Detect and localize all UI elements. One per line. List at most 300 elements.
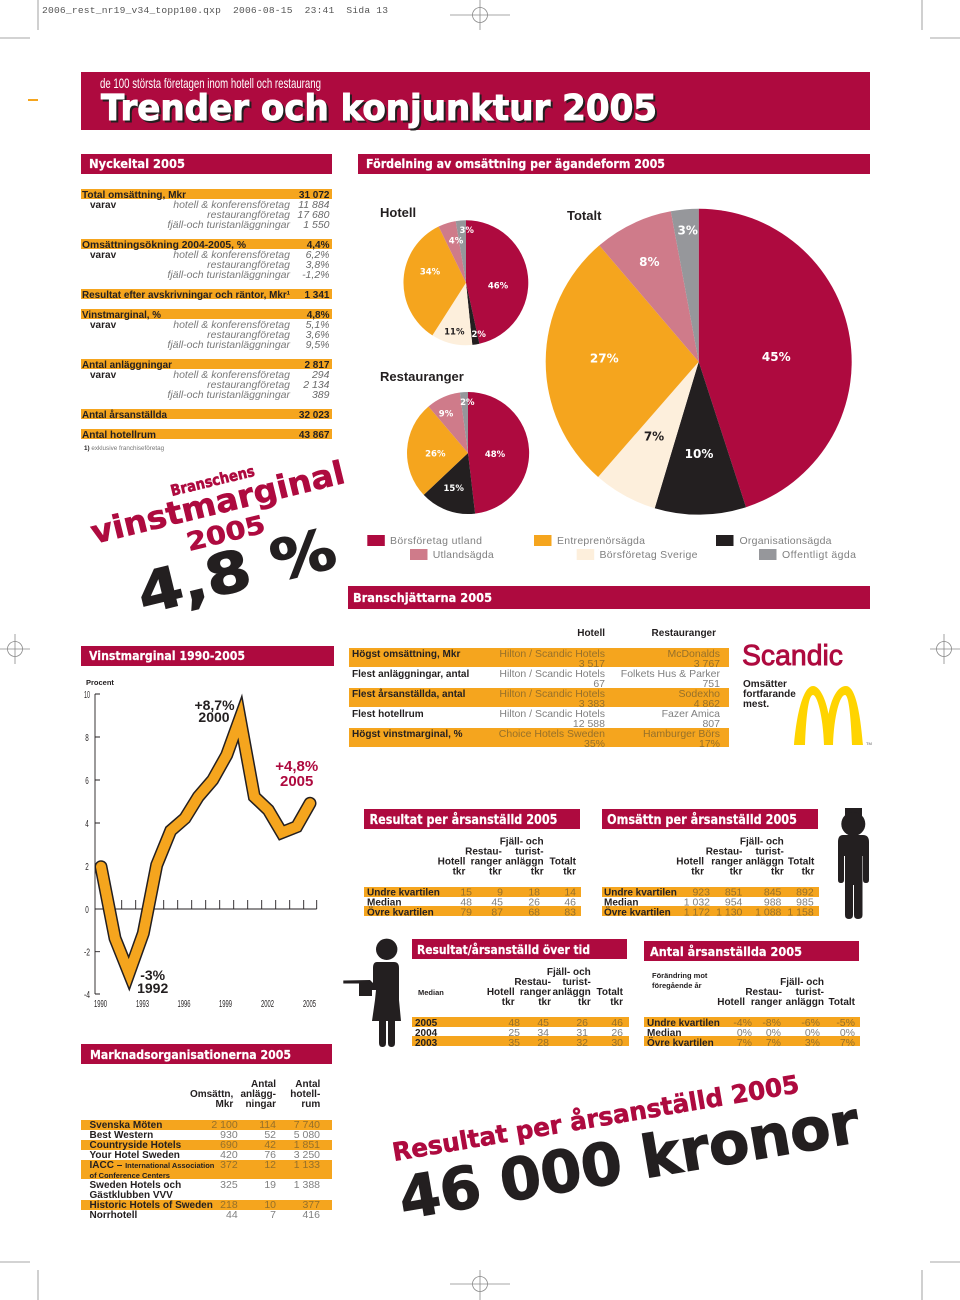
panel: Nyckeltal 2005: hotell & konferensföretag (173, 369, 290, 381)
pie chart: Restauranger: 2% (460, 398, 475, 408)
line chart: 1993 (136, 999, 149, 1010)
panel: Omsättn per årsanställd 2005: 923 (692, 886, 710, 898)
panel: Resultat/årsanställd över tid: 31 (576, 1027, 588, 1039)
line chart: 4 (85, 819, 89, 830)
panel: Nyckeltal 2005: Nyckeltal 2005 (89, 156, 185, 171)
panel: Nyckeltal 2005: restaurangföretag (207, 329, 290, 341)
icon: male waiter (838, 808, 869, 919)
panel: Branschjättarna 2005: Hilton / Scandic Hotels (499, 668, 605, 680)
panel: Branschjättarna 2005: Hilton / Scandic Hotels (499, 708, 605, 720)
panel: Resultat/årsanställd över tid: 2003 (415, 1038, 438, 1049)
callout: Branschens vinstmarginal 4,8 %: 4,8 % (131, 517, 343, 628)
panel: Resultat/årsanställd över tid: 2005 (415, 1018, 438, 1029)
panel: Nyckeltal 2005: 32 023 (299, 410, 330, 421)
panel: Resultat/årsanställd över tid: tkr (502, 997, 515, 1008)
panel: Omsättn per årsanställd 2005: tkr (802, 866, 814, 878)
panel: Marknadsorganisationerna 2005: 420 (220, 1149, 238, 1161)
panel: Omsättn per årsanställd 2005 (602, 809, 819, 918)
pie chart: Hotell: 34% (420, 268, 441, 278)
panel: Branschjättarna 2005: Flest hotellrum (352, 709, 424, 720)
panel: Marknadsorganisationerna 2005: 42 (264, 1139, 276, 1151)
pie chart: Restauranger: 15% (444, 484, 464, 494)
annotation: 2000 peak: +8,7% (194, 697, 235, 713)
panel: Marknadsorganisationerna 2005: 218 (220, 1199, 238, 1211)
pie chart: Hotell (380, 205, 528, 345)
panel: Nyckeltal 2005: 3,6% (306, 329, 330, 341)
callout: Branschens vinstmarginal 4,8 %: Branschens (169, 462, 257, 500)
panel: Resultat/årsanställd över tid: anläggn (552, 987, 591, 998)
panel: Marknadsorganisationerna 2005: 416 (302, 1209, 320, 1221)
panel: Marknadsorganisationerna 2005: 7 (270, 1209, 276, 1221)
line chart: 1990 (94, 999, 107, 1010)
panel: Omsättn per årsanställd 2005: 1 032 (684, 896, 710, 908)
panel: Nyckeltal 2005: varav (90, 370, 117, 381)
callout: Branschens vinstmarginal 4,8 %: 2005 (184, 510, 268, 557)
panel: Marknadsorganisationerna 2005: Countryside Hotels (90, 1140, 182, 1151)
panel: Marknadsorganisationerna 2005: Antal (295, 1079, 321, 1090)
panel: Branschjättarna 2005: Choice Hotels Sweden (499, 728, 605, 740)
panel: Marknadsorganisationerna 2005: Historic Hotels of Sweden (90, 1200, 213, 1211)
panel: Antal årsanställda 2005: Totalt (829, 997, 856, 1008)
note: Omsätter fortfarande mest: fortfarande (743, 689, 796, 700)
panel: Nyckeltal 2005: 4,4% (307, 240, 330, 251)
panel: Resultat per årsanställd 2005: 68 (528, 906, 540, 918)
pie chart: Totalt: 10% (685, 447, 713, 461)
panel: Marknadsorganisationerna 2005: Best Western (90, 1130, 153, 1141)
line chart: 2002 (261, 999, 274, 1010)
panel: Marknadsorganisationerna 2005: 52 (264, 1129, 276, 1141)
annotation: 1992 low: -3% (140, 967, 166, 983)
panel: Omsättn per årsanställd 2005: Restau- (706, 846, 742, 858)
panel: Marknadsorganisationerna 2005: Gästklubben VVV (90, 1190, 173, 1201)
panel: Resultat per årsanställd 2005: anläggn (505, 856, 544, 868)
annotation: 2000 peak: 2000 (198, 709, 230, 725)
title banner: Trender och konjunktur 2005 (101, 88, 657, 129)
panel: Marknadsorganisationerna 2005: 325 (220, 1179, 238, 1191)
panel: Fördelning av omsättning per ägandeform 2005 (358, 154, 870, 174)
pie chart: Restauranger: 9% (439, 410, 454, 420)
panel: Resultat per årsanställd 2005: Resultat per årsanställd 2005 (370, 813, 558, 828)
panel: Marknadsorganisationerna 2005: 3 250 (294, 1149, 320, 1161)
panel: Omsättn per årsanställd 2005: Omsättn per årsanställd 2005 (607, 813, 797, 828)
panel: Nyckeltal 2005: hotell & konferensföretag (173, 249, 290, 261)
annotation: 2000 peak (194, 697, 235, 725)
pie chart: Totalt: 45% (762, 350, 791, 364)
panel: Nyckeltal 2005: fjäll-och turistanläggningar (167, 219, 290, 231)
panel: Branschjättarna 2005: Restauranger (652, 628, 716, 639)
legend: Offentligt ägda (782, 549, 856, 561)
panel: Marknadsorganisationerna 2005: 690 (220, 1139, 238, 1151)
panel: Resultat/årsanställd över tid: Resultat/årsanställd över tid (417, 942, 590, 957)
panel: Antal årsanställda 2005: 0% (766, 1027, 781, 1039)
panel: Resultat per årsanställd 2005: 83 (564, 906, 576, 918)
panel: Omsättn per årsanställd 2005: Övre kvartilen (604, 906, 671, 918)
panel: Branschjättarna 2005: Hotell (577, 628, 605, 639)
panel: Antal årsanställda 2005: 3% (805, 1037, 820, 1049)
panel: Marknadsorganisationerna 2005: Antal (251, 1079, 276, 1090)
panel: Resultat/årsanställd över tid: 25 (508, 1027, 520, 1039)
panel: Marknadsorganisationerna 2005: IACC – International Association (90, 1160, 215, 1171)
panel: Resultat/årsanställd över tid: 35 (508, 1037, 520, 1049)
panel: Nyckeltal 2005 (81, 154, 332, 452)
panel: Nyckeltal 2005: Resultat efter avskrivningar och räntor, Mkr¹ (82, 290, 291, 301)
panel: Nyckeltal 2005: hotell & konferensföretag (173, 319, 290, 331)
panel: Omsättn per årsanställd 2005: Fjäll- och (740, 836, 784, 848)
legend: Entreprenörsägda (557, 535, 645, 547)
panel: Omsättn per årsanställd 2005: 1 172 (684, 906, 710, 918)
panel: Nyckeltal 2005: Antal anläggningar (82, 360, 172, 371)
panel: Resultat/årsanställd över tid: 34 (537, 1027, 549, 1039)
panel: Antal årsanställda 2005: 0% (805, 1027, 820, 1039)
panel: Branschjättarna 2005: 807 (702, 718, 720, 730)
panel: Marknadsorganisationerna 2005: 377 (302, 1199, 320, 1211)
panel: Marknadsorganisationerna 2005: Norrhotell (90, 1210, 138, 1221)
panel: Branschjättarna 2005: 67 (593, 678, 605, 690)
panel: Omsättn per årsanställd 2005: tkr (691, 866, 704, 878)
panel: Nyckeltal 2005: varav (90, 200, 117, 211)
pie chart: Hotell: 4% (449, 236, 464, 246)
panel: Omsättn per årsanställd 2005: 845 (764, 886, 782, 898)
legend: Utlandsägda (433, 549, 494, 561)
panel: Resultat/årsanställd över tid: 48 (508, 1017, 520, 1029)
panel: Resultat per årsanställd 2005: tkr (531, 866, 544, 878)
panel: Nyckeltal 2005: 4,8% (307, 310, 330, 321)
pie chart: Totalt: 27% (590, 352, 619, 366)
panel: Nyckeltal 2005: 11 884 (298, 199, 330, 211)
panel: Omsättn per årsanställd 2005: ranger (711, 856, 743, 868)
panel: Marknadsorganisationerna 2005: of Conference Centers (90, 1171, 170, 1180)
panel: Branschjättarna 2005 (348, 586, 870, 750)
legend: Börsföretag Sverige (600, 549, 698, 561)
panel: Marknadsorganisationerna 2005: rum (301, 1099, 320, 1110)
panel: Marknadsorganisationerna 2005: Marknadsorganisationerna 2005 (90, 1047, 291, 1062)
panel: Omsättn per årsanställd 2005: 892 (796, 886, 814, 898)
panel: Antal årsanställda 2005: 7% (840, 1037, 855, 1049)
panel: Nyckeltal 2005: -1,2% (302, 269, 330, 281)
panel: Branschjättarna 2005: Fazer Amica (662, 708, 720, 720)
panel: Resultat per årsanställd 2005: 46 (564, 896, 576, 908)
pie chart: Hotell: 46% (488, 282, 509, 292)
annotation: 2005 (275, 758, 318, 790)
panel: Resultat/årsanställd över tid: 45 (537, 1017, 549, 1029)
annotation: 1992 low (137, 967, 168, 996)
panel: Branschjättarna 2005: Flest anläggningar, antal (352, 669, 469, 680)
line chart: 2005 (303, 999, 316, 1010)
panel: Antal årsanställda 2005: Restau- (745, 987, 782, 998)
panel: Antal årsanställda 2005: Övre kvartilen (647, 1036, 714, 1049)
panel: Marknadsorganisationerna 2005: Omsättn, (190, 1089, 234, 1100)
panel: Resultat per årsanställd 2005: Totalt (550, 856, 577, 868)
panel: Omsättn per årsanställd 2005: 1 088 (755, 906, 782, 918)
line chart: 1999 (219, 999, 232, 1010)
line chart: -2 (84, 948, 90, 958)
title banner: de 100 största företagen inom hotell och restaurang (100, 75, 321, 91)
panel: Nyckeltal 2005: Antal hotellrum (82, 430, 156, 441)
title banner (81, 72, 870, 131)
panel: Resultat/årsanställd över tid: 28 (537, 1037, 549, 1049)
panel: Nyckeltal 2005: varav (90, 250, 117, 261)
panel: Resultat per årsanställd 2005: Övre kvartilen (367, 906, 434, 918)
panel: Resultat/årsanställd över tid: Hotell (487, 987, 515, 998)
panel: Branschjättarna 2005: 3 517 (579, 658, 605, 670)
panel: Resultat/årsanställd över tid: 30 (611, 1037, 623, 1049)
note: Omsätter fortfarande mest (743, 679, 796, 710)
panel: Nyckeltal 2005: Antal årsanställda (82, 409, 167, 421)
panel: Resultat per årsanställd 2005: 18 (528, 886, 540, 898)
panel: Omsättn per årsanställd 2005: 954 (725, 896, 743, 908)
pie chart: Hotell: 3% (459, 226, 474, 236)
panel: Resultat per årsanställd 2005: tkr (489, 866, 502, 878)
panel: Marknadsorganisationerna 2005: Sweden Hotels och (90, 1180, 181, 1191)
panel: Omsättn per årsanställd 2005: turist- (755, 846, 784, 858)
line chart: -4 (84, 990, 90, 1001)
panel: Resultat per årsanställd 2005: ranger (471, 856, 502, 868)
panel: Marknadsorganisationerna 2005: 372 (220, 1159, 238, 1171)
pie chart: Totalt (546, 208, 852, 515)
pie chart: Restauranger: 26% (425, 450, 446, 460)
panel: Branschjättarna 2005: Sodexho (679, 688, 720, 700)
line chart: 6 (85, 776, 89, 787)
panel: Nyckeltal 2005: 43 867 (299, 430, 330, 441)
panel: Nyckeltal 2005: 6,2% (306, 249, 330, 261)
panel: Marknadsorganisationerna 2005: hotell- (290, 1089, 320, 1100)
panel: Resultat/årsanställd över tid: 2004 (415, 1028, 438, 1039)
panel: Antal årsanställda 2005: Antal årsanställda 2005 (650, 944, 802, 959)
callout: Branschens vinstmarginal 4,8 % (87, 453, 348, 628)
panel: Vinstmarginal 1990-2005 (81, 646, 334, 1010)
panel: Marknadsorganisationerna 2005: anlägg- (240, 1089, 276, 1100)
panel: Nyckeltal 2005: 9,5% (306, 339, 330, 351)
panel: Marknadsorganisationerna 2005: ningar (245, 1099, 276, 1110)
panel: Nyckeltal 2005: 1 550 (303, 219, 330, 231)
panel: Nyckeltal 2005: Total omsättning, Mkr (82, 190, 186, 201)
line chart: 0 (85, 905, 89, 916)
panel: Branschjättarna 2005: Hilton / Scandic Hotels (499, 648, 605, 660)
panel: Marknadsorganisationerna 2005: 10 (264, 1199, 276, 1211)
panel: Marknadsorganisationerna 2005: Your Hotel Sweden (90, 1150, 180, 1161)
panel: Marknadsorganisationerna 2005: Svenska Möten (90, 1120, 162, 1131)
panel: Marknadsorganisationerna 2005: 1 851 (294, 1139, 320, 1151)
panel: Nyckeltal 2005: 17 680 (297, 209, 330, 221)
panel: Branschjättarna 2005: Högst omsättning, Mkr (352, 649, 460, 660)
legend: Börsföretag utland (390, 535, 482, 547)
panel: Nyckeltal 2005: fjäll-och turistanläggningar (167, 339, 290, 351)
pie chart: Hotell: Hotell (380, 205, 416, 220)
pie chart: Totalt: Totalt (567, 208, 602, 223)
panel: Resultat/årsanställd över tid: Fjäll- och (547, 967, 591, 978)
panel: Marknadsorganisationerna 2005: 7 740 (294, 1119, 320, 1131)
panel: Resultat/årsanställd över tid: tkr (578, 997, 591, 1008)
panel: Antal årsanställda 2005: Median (647, 1028, 681, 1039)
legend (367, 535, 856, 561)
panel: Resultat per årsanställd 2005: 15 (460, 886, 472, 898)
pie chart: Hotell: 11% (444, 328, 465, 338)
file slug: 2006_rest_nr19_v34_topp100.qxp 2006-08-15 23:41 Sida 13 (42, 5, 388, 16)
panel: Antal årsanställda 2005: 7% (766, 1037, 781, 1049)
pie chart: Restauranger (380, 369, 529, 514)
panel: Nyckeltal 2005: 1 341 (304, 290, 330, 301)
panel: Nyckeltal 2005: Omsättningsökning 2004-2005, % (82, 240, 246, 251)
panel: Marknadsorganisationerna 2005: 930 (220, 1129, 238, 1141)
panel: Nyckeltal 2005: Vinstmarginal, % (82, 310, 161, 321)
panel: Branschjättarna 2005: Högst vinstmarginal, % (352, 729, 463, 740)
line chart (84, 690, 317, 1010)
annotation: 1992 low: 1992 (137, 980, 168, 996)
legend: Organisationsägda (740, 535, 832, 547)
panel: Marknadsorganisationerna 2005: 5 080 (294, 1129, 320, 1141)
panel: Antal årsanställda 2005: föregående år (652, 981, 702, 990)
callout: Resultat per årsanställd 46 000 kronor: Resultat per årsanställd 2005 (390, 1070, 801, 1167)
panel: Omsättn per årsanställd 2005: 985 (796, 896, 814, 908)
panel: Resultat/årsanställd över tid: Totalt (597, 987, 624, 998)
panel: Omsättn per årsanställd 2005: 988 (764, 896, 782, 908)
panel: Branschjättarna 2005: Flest årsanställda, antal (352, 688, 466, 700)
panel: Marknadsorganisationerna 2005: 1 388 (294, 1179, 320, 1191)
panel: Resultat/årsanställd över tid: 26 (576, 1017, 588, 1029)
panel: Resultat per årsanställd 2005: 48 (460, 896, 472, 908)
panel: Resultat per årsanställd 2005: Fjäll- och (500, 836, 544, 848)
panel: Branschjättarna 2005: 3 767 (694, 658, 720, 670)
logo: Scandic: Scandic (742, 640, 843, 672)
logo: McDonald's arches (794, 686, 872, 746)
panel: Nyckeltal 2005: 31 072 (299, 190, 330, 201)
panel: Nyckeltal 2005: hotell & konferensföretag (173, 199, 290, 211)
callout: Resultat per årsanställd 46 000 kronor: 46 000 kronor (394, 1088, 864, 1233)
panel: Branschjättarna 2005: 35% (584, 738, 605, 750)
panel: Fördelning av omsättning per ägandeform 2005: Fördelning av omsättning per ägandeform 2005 (366, 156, 665, 171)
panel: Resultat/årsanställd över tid (412, 939, 629, 1049)
panel: Resultat per årsanställd 2005: tkr (563, 866, 576, 878)
panel: Branschjättarna 2005: 751 (702, 678, 720, 690)
annotation: 2005: +4,8% (275, 758, 318, 775)
panel: Antal årsanställda 2005: Hotell (717, 997, 745, 1008)
line chart: 2 (85, 862, 89, 873)
panel: Omsättn per årsanställd 2005: 1 130 (716, 906, 743, 918)
title banner: Trender och konjunktur 2005 (103, 90, 659, 131)
panel: Resultat/årsanställd över tid: 46 (611, 1017, 623, 1029)
panel: Antal årsanställda 2005: -4% (733, 1017, 752, 1029)
panel: Marknadsorganisationerna 2005: 1 133 (294, 1159, 320, 1171)
panel: Branschjättarna 2005: Branschjättarna 2005 (353, 590, 492, 605)
panel: Resultat/årsanställd över tid: tkr (610, 997, 623, 1008)
panel: Omsättn per årsanställd 2005: Hotell (676, 856, 704, 868)
panel: Nyckeltal 2005: 5,1% (306, 319, 330, 331)
panel: Branschjättarna 2005: McDonalds (667, 648, 720, 660)
panel: Resultat per årsanställd 2005: tkr (453, 866, 465, 878)
panel: Resultat/årsanställd över tid: 32 (576, 1037, 588, 1049)
panel: Antal årsanställda 2005: turist- (796, 987, 824, 998)
panel: Resultat/årsanställd över tid: Median (418, 988, 444, 997)
orange margin dash (28, 99, 38, 101)
panel: Resultat per årsanställd 2005: turist- (515, 846, 544, 858)
note: Omsätter fortfarande mest: mest. (743, 699, 769, 710)
panel: Antal årsanställda 2005: 7% (737, 1037, 752, 1049)
line chart: 10 (84, 690, 90, 701)
panel: Nyckeltal 2005: restaurangföretag (207, 209, 290, 221)
pie chart: Totalt: 3% (678, 224, 698, 238)
panel: Marknadsorganisationerna 2005: Mkr (216, 1099, 233, 1110)
panel: Resultat per årsanställd 2005: Undre kvartilen (367, 888, 440, 898)
note: Omsätter fortfarande mest: Omsätter (743, 679, 787, 690)
panel: Antal årsanställda 2005: 0% (840, 1027, 855, 1039)
panel: Resultat/årsanställd över tid: tkr (538, 997, 551, 1008)
panel: Marknadsorganisationerna 2005: 19 (264, 1179, 276, 1191)
panel: Nyckeltal 2005: 1) exklusive franchiseföretag (84, 445, 165, 452)
pie chart: Restauranger: 48% (485, 450, 506, 460)
panel: Antal årsanställda 2005: Undre kvartilen (647, 1018, 720, 1029)
panel: Antal årsanställda 2005: Fjäll- och (780, 977, 824, 988)
panel: Nyckeltal 2005: 294 (311, 369, 330, 381)
panel: Resultat/årsanställd över tid: ranger (520, 987, 551, 998)
panel: Branschjättarna 2005: 4 862 (694, 698, 720, 710)
panel: Resultat per årsanställd 2005 (364, 809, 581, 918)
pie chart: Hotell: 2% (471, 330, 486, 340)
panel: Antal årsanställda 2005: ranger (751, 997, 782, 1008)
panel: Nyckeltal 2005: fjäll-och turistanläggningar (167, 269, 290, 281)
panel: Nyckeltal 2005: varav (90, 320, 117, 331)
panel: Antal årsanställda 2005: 0% (737, 1027, 752, 1039)
panel: Marknadsorganisationerna 2005 (81, 1044, 332, 1221)
panel: Marknadsorganisationerna 2005: 2 100 (211, 1119, 238, 1131)
panel: Branschjättarna 2005: 3 383 (579, 698, 605, 710)
panel: Antal årsanställda 2005: anläggn (786, 997, 824, 1008)
panel: Omsättn per årsanställd 2005: Median (604, 898, 638, 908)
icon: waitress with tray (343, 939, 401, 1047)
line chart: 1996 (178, 999, 191, 1010)
panel: Resultat per årsanställd 2005: Hotell (438, 856, 466, 868)
panel: Nyckeltal 2005: restaurangföretag (207, 259, 290, 271)
panel: Branschjättarna 2005: Folkets Hus & Parker (621, 668, 720, 680)
panel: Antal årsanställda 2005 (644, 941, 860, 1049)
panel: Antal årsanställda 2005: Förändring mot (652, 971, 708, 980)
panel: Resultat per årsanställd 2005: Median (367, 898, 401, 908)
panel: Branschjättarna 2005: 17% (699, 738, 720, 750)
panel: Omsättn per årsanställd 2005: 1 158 (787, 906, 814, 918)
panel: Resultat per årsanställd 2005: 45 (491, 896, 503, 908)
panel: Branschjättarna 2005: Hilton / Scandic Hotels (499, 688, 605, 700)
panel: Antal årsanställda 2005: -6% (801, 1017, 820, 1029)
panel: Marknadsorganisationerna 2005: 76 (264, 1149, 276, 1161)
panel: Marknadsorganisationerna 2005: 12 (264, 1159, 276, 1171)
panel: Antal årsanställda 2005: -8% (762, 1017, 781, 1029)
panel: Branschjättarna 2005: 12 588 (573, 718, 605, 730)
panel: Omsättn per årsanställd 2005: anläggn (745, 856, 784, 868)
panel: Resultat per årsanställd 2005: 79 (460, 906, 472, 918)
pie chart: Restauranger: Restauranger (380, 369, 464, 384)
panel: Nyckeltal 2005: restaurangföretag (207, 379, 290, 391)
panel: Omsättn per årsanställd 2005: Totalt (788, 856, 815, 868)
panel: Marknadsorganisationerna 2005: 114 (259, 1119, 276, 1131)
panel: Resultat per årsanställd 2005: 87 (491, 906, 503, 918)
panel: Resultat/årsanställd över tid: Restau- (514, 977, 551, 988)
panel: Marknadsorganisationerna 2005: 44 (226, 1209, 238, 1221)
panel: Resultat per årsanställd 2005: 26 (528, 896, 540, 908)
panel: Resultat per årsanställd 2005: Restau- (465, 846, 502, 858)
panel: Antal årsanställda 2005: -5% (836, 1017, 855, 1029)
panel: Branschjättarna 2005: Hamburger Börs (643, 728, 720, 740)
callout: Branschens vinstmarginal 4,8 %: vinstmarginal (87, 453, 348, 552)
panel: Vinstmarginal 1990-2005: Vinstmarginal 1990-2005 (89, 648, 245, 663)
panel: Resultat per årsanställd 2005: 14 (564, 886, 576, 898)
panel: Omsättn per årsanställd 2005: 851 (725, 886, 743, 898)
panel: Omsättn per årsanställd 2005: tkr (771, 866, 784, 878)
panel: Resultat per årsanställd 2005: 9 (497, 886, 503, 898)
annotation: 2005: 2005 (280, 773, 313, 790)
pie chart: Totalt: 7% (644, 430, 664, 444)
panel: Resultat/årsanställd över tid: turist- (562, 977, 591, 988)
pie chart: Totalt: 8% (639, 255, 659, 269)
panel: Nyckeltal 2005: 3,8% (306, 259, 330, 271)
